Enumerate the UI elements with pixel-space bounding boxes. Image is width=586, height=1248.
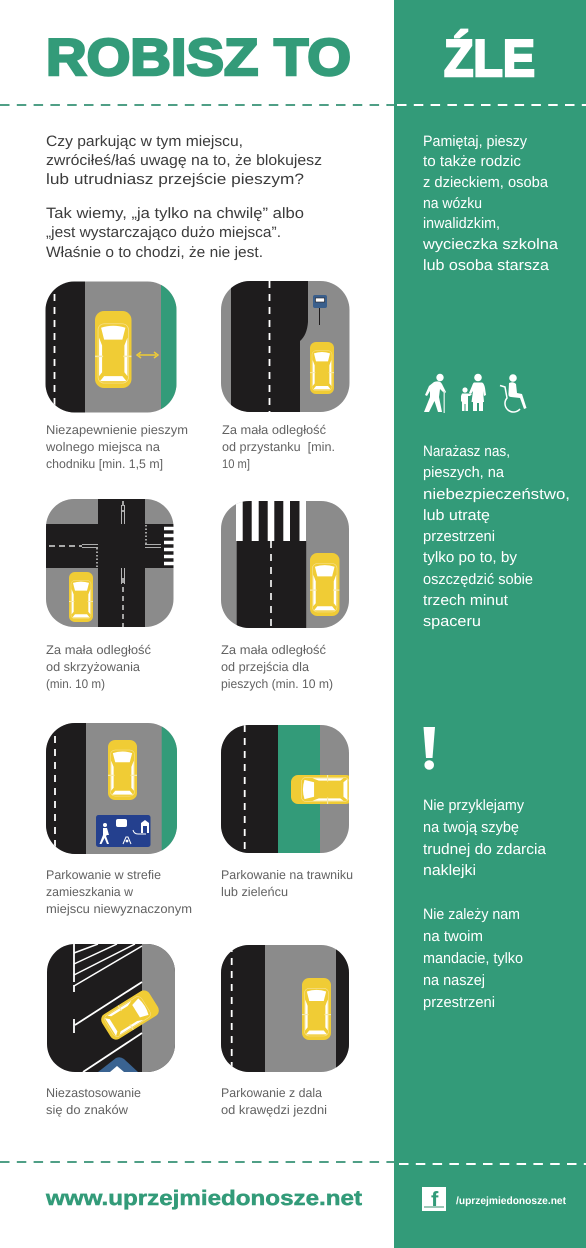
caption 8: od krawędzi jezdni — [221, 1103, 327, 1117]
panel: tile 5 residential zone — [46, 723, 178, 854]
icons: pedestrians — [424, 374, 526, 413]
caption 5: Parkowanie w strefie — [46, 868, 161, 882]
side text: sticker and ticket: Nie przyklejamy — [423, 797, 524, 814]
side text: sticker and ticket: naklejki — [423, 862, 476, 879]
intro text: zwróciłeś/łaś uwagę na to, że blokujesz — [46, 152, 322, 169]
caption 8 — [221, 1086, 327, 1117]
side text: danger: Narażasz nas, — [423, 443, 510, 460]
side text: sticker and ticket: na twoim — [423, 928, 483, 945]
side text: danger: tylko po to, by — [423, 549, 517, 566]
icon: facebook — [422, 1187, 446, 1212]
side text: reminder: z dzieckiem, osoba — [423, 174, 549, 191]
icon: residential zone sign — [96, 815, 150, 847]
caption 3 — [46, 643, 151, 691]
caption 1: wolnego miejsca na — [45, 440, 160, 454]
icon: wheelchair user — [500, 374, 526, 412]
caption 1 — [45, 423, 188, 471]
caption 4 — [221, 643, 333, 691]
caption 6 — [221, 868, 353, 899]
intro text: Czy parkując w tym miejscu, — [46, 133, 243, 150]
side text: sticker and ticket: na twoją szybę — [423, 819, 519, 836]
side text: danger: oszczędzić sobie — [423, 571, 533, 588]
panel: tile 4 crossing — [221, 501, 349, 628]
icon: elderly person — [424, 374, 446, 413]
caption 2: Za mała odległość — [222, 423, 326, 437]
panel: tile 7 signs — [47, 944, 175, 1072]
panel: green side column — [394, 0, 586, 1248]
caption 2: od przystanku [min. — [222, 440, 335, 454]
intro text — [46, 133, 322, 261]
side text: reminder: to także rodzic — [423, 153, 521, 170]
side text: reminder: na wózku — [423, 195, 482, 212]
intro text: „jest wystarczająco dużo miejsca”. — [46, 224, 281, 241]
caption 2 — [222, 423, 335, 471]
side text: sticker and ticket: Nie zależy nam — [423, 906, 520, 923]
side text: reminder: lub osoba starsza — [423, 257, 550, 274]
icon: woman with child — [461, 374, 486, 411]
caption 4: od przejścia dla — [221, 660, 309, 674]
side text: danger: trzech minut — [423, 592, 509, 609]
side text: danger: niebezpieczeństwo, — [423, 486, 570, 503]
caption 2: 10 m] — [222, 457, 250, 471]
side text: sticker and ticket — [423, 797, 547, 1011]
footer website: www.uprzejmiedonosze.net — [45, 1187, 362, 1210]
side text: danger: spaceru — [423, 613, 481, 630]
caption 6: Parkowanie na trawniku — [221, 868, 353, 882]
caption 7: Niezastosowanie — [46, 1086, 141, 1100]
side text: reminder: wycieczka szkolna — [422, 236, 559, 253]
caption 8: Parkowanie z dala — [221, 1086, 322, 1100]
caption 7: się do znaków — [46, 1103, 129, 1117]
footer facebook handle: /uprzejmiedonosze.net — [456, 1195, 566, 1207]
caption 4: pieszych (min. 10 m) — [221, 677, 333, 691]
intro text: Tak wiemy, „ja tylko na chwilę” albo — [46, 205, 304, 222]
side text: reminder: Pamiętaj, pieszy — [423, 133, 527, 150]
icon: exclamation mark — [424, 727, 435, 770]
caption 1: Niezapewnienie pieszym — [46, 423, 188, 437]
panel: tile 2 bus stop — [221, 281, 350, 413]
caption 3: Za mała odległość — [46, 643, 151, 657]
title: ROBISZ TO: ROBISZ TO — [46, 29, 351, 87]
caption 1: chodniku [min. 1,5 m] — [46, 457, 163, 471]
intro text: lub utrudniasz przejście pieszym? — [46, 171, 304, 188]
intro text: Właśnie o to chodzi, że nie jest. — [46, 244, 263, 261]
caption 3: od skrzyżowania — [46, 660, 140, 674]
side text: sticker and ticket: trudnej do zdarcia — [423, 841, 547, 858]
panel: tile 1 sidewalk — [45, 281, 177, 413]
side text: sticker and ticket: na naszej — [423, 972, 485, 989]
side text: sticker and ticket: przestrzeni — [423, 994, 495, 1011]
side text: reminder: inwalidzkim, — [423, 215, 500, 232]
caption 5: miejscu niewyznaczonym — [46, 902, 192, 916]
caption 5 — [46, 868, 192, 916]
side text: sticker and ticket: mandacie, tylko — [423, 950, 523, 967]
side text: danger: lub utratę — [423, 507, 490, 524]
caption 4: Za mała odległość — [221, 643, 326, 657]
side text: danger: pieszych, na — [423, 464, 505, 481]
panel: tile 3 intersection — [46, 499, 174, 627]
caption 7 — [46, 1086, 141, 1117]
panel: tile 8 far from kerb — [221, 945, 349, 1072]
caption 3: (min. 10 m) — [46, 677, 105, 691]
side text: danger — [423, 443, 570, 630]
panel: tile 6 lawn — [221, 725, 353, 853]
caption 6: lub zieleńcu — [221, 885, 288, 899]
side text: reminder — [422, 133, 559, 274]
side text: danger: przestrzeni — [423, 528, 495, 545]
icon: facebook: f — [431, 1187, 439, 1212]
title: ŹLE: ŹLE — [444, 29, 535, 88]
caption 5: zamieszkania w — [46, 885, 134, 899]
